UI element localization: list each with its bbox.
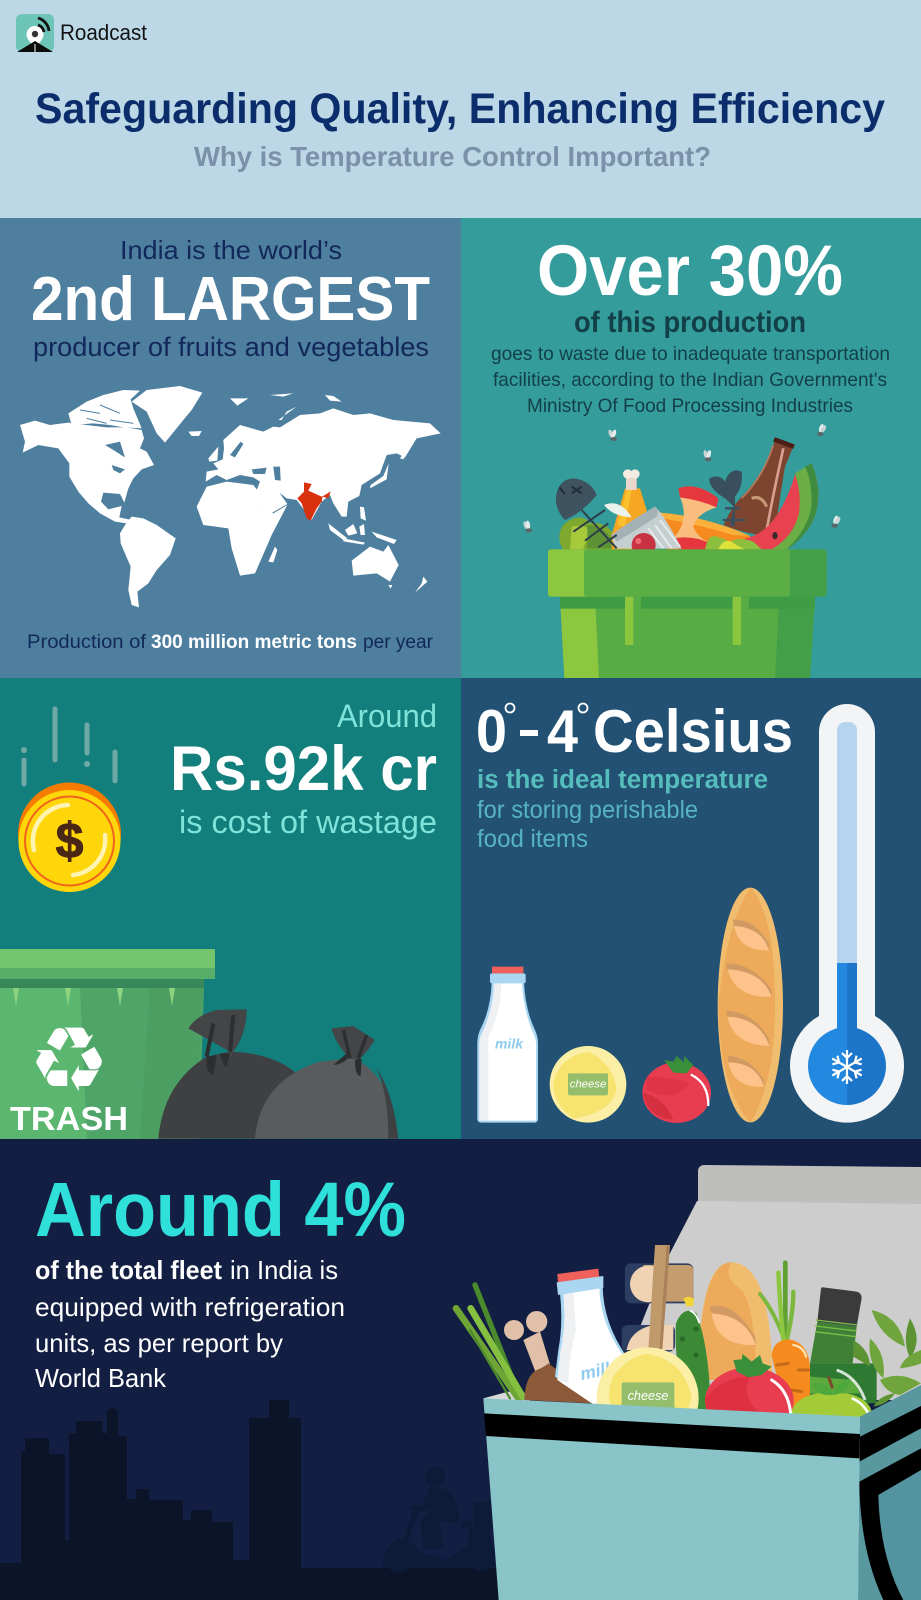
food: cheese: cheese: [628, 1389, 668, 1403]
icon: thermometer: [790, 704, 904, 1123]
bin rim: [548, 549, 827, 597]
panel: over 30% waste: [461, 218, 921, 678]
illustration: milk, cheese, tomato, bread: [477, 888, 783, 1123]
text: for storing perishable food items: [477, 796, 698, 853]
food: spring onions: [456, 1285, 523, 1398]
text: for storing perishable food items: food items: [477, 825, 588, 853]
subheading: is the ideal temperature: is the ideal temperature: [477, 766, 768, 794]
food: bottle: [810, 1287, 877, 1403]
food: bread: [698, 1262, 772, 1380]
subtitle: Why is Temperature Control Important?: [194, 141, 711, 172]
rubbish pile: [556, 439, 818, 557]
city skyline silhouette: [0, 1400, 510, 1600]
text: fleet statistic: of the total fleet: [35, 1255, 222, 1285]
heading: Around 4%: Around 4%: [35, 1167, 406, 1253]
text: waste explanation: goes to waste due to inadequate transportation: [491, 343, 890, 365]
heading: Rs.92k cr: Rs.92k cr: [170, 734, 437, 804]
text: production figure: [27, 632, 434, 653]
text: waste explanation: Ministry Of Food Processing Industries: [527, 395, 853, 417]
text: production figure: Production of: [27, 632, 147, 653]
panel: refrigerated fleet: [0, 1139, 921, 1600]
bin body: [560, 597, 815, 678]
icon: garbage bags: [158, 1009, 398, 1139]
heading: India is the world's: India is the world’s: [120, 235, 342, 265]
logo: Roadcast: Roadcast: [60, 20, 147, 45]
text: producer of fruits and vegetables: producer of fruits and vegetables: [33, 332, 429, 362]
food: carrot: [760, 1263, 810, 1413]
text: fleet statistic: [35, 1255, 345, 1393]
subheading: of this production: of this production: [574, 306, 806, 339]
icon: falling coin: $: [56, 813, 84, 869]
food: cheese: [597, 1347, 699, 1449]
heading: 2nd LARGEST: 2nd LARGEST: [31, 265, 430, 334]
icon: waste bin with rubbish: [522, 423, 842, 678]
icon: milk bottle: [477, 967, 538, 1123]
text: fleet statistic: World Bank: [35, 1363, 167, 1393]
food: chicken leg: [504, 1311, 594, 1403]
text: fleet statistic: equipped with refrigeration: [35, 1292, 345, 1322]
illustration: delivery box with food: [456, 1165, 921, 1600]
food: herb leaves: [853, 1310, 921, 1407]
heading: 0-4 Celsius: [476, 698, 793, 765]
text: waste explanation: facilities, according to the Indian Government's: [493, 369, 887, 391]
header panel: [0, 0, 921, 218]
food: milk bottle: [555, 1269, 627, 1407]
food: apple: [792, 1370, 872, 1435]
label: TRASH: TRASH: [10, 1100, 128, 1137]
heading: Over 30%: Over 30%: [537, 232, 843, 311]
text: Around: Around: [337, 698, 437, 734]
box front and side: [483, 1385, 921, 1600]
text: production figure: 300 million metric tons: [151, 632, 357, 653]
food: tomato: [705, 1354, 794, 1434]
title: Safeguarding Quality, Enhancing Efficiency: [35, 85, 885, 133]
heading: 0-4 Celsius: 4: [547, 698, 579, 765]
panel: ideal temperature: [461, 678, 921, 1139]
text: is cost of wastage: is cost of wastage: [179, 804, 437, 840]
box inner corner: [483, 1392, 530, 1403]
text: production figure: per year: [363, 632, 434, 653]
heading: 0-4 Celsius: 0: [476, 698, 507, 765]
food: milk bottle: milk: [578, 1357, 618, 1384]
food: cucumber: [676, 1297, 711, 1413]
logo: Roadcast: [16, 14, 147, 52]
icon: milk bottle: milk: [495, 1035, 524, 1051]
panel: India production: [0, 218, 461, 678]
icon: tomato: [642, 1056, 711, 1123]
icon: recycling symbol: ♻: [29, 1008, 109, 1113]
flies: [522, 423, 842, 532]
icon: snowflake: [830, 1050, 864, 1084]
world map: [20, 386, 441, 607]
text: fleet statistic: in India is: [230, 1255, 338, 1285]
text: waste explanation: [491, 343, 890, 417]
icon: falling coin: [18, 709, 121, 892]
heading: 0-4 Celsius: Celsius: [593, 698, 793, 765]
panel: cost of wastage: [0, 678, 461, 1139]
icon: cheese: [550, 1046, 626, 1123]
icon: cheese: cheese: [570, 1079, 606, 1091]
icon: trash bin: [0, 949, 215, 1139]
food: egg carton: [622, 1245, 693, 1352]
text: for storing perishable food items: for storing perishable: [477, 796, 698, 824]
box lid: [640, 1165, 921, 1400]
India highlighted: [297, 482, 331, 521]
delivery scooter silhouette: [383, 1467, 496, 1572]
text: fleet statistic: units, as per report by: [35, 1328, 283, 1358]
icon: baguette: [718, 888, 783, 1122]
